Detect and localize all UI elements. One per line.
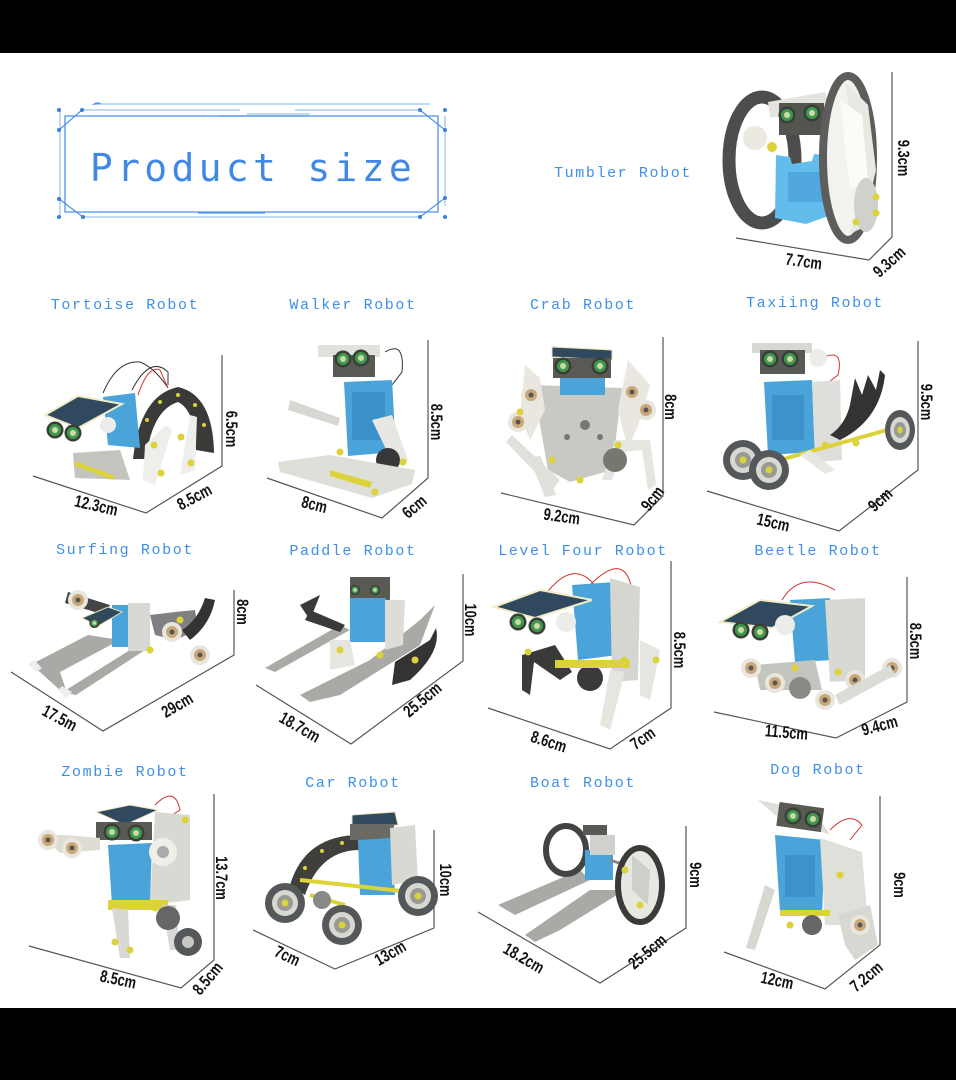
dimensions: Tortoise: 12.3cm [73,492,120,520]
dimensions: Dog: 7.2cm [847,958,887,996]
robot: Surfing [28,590,215,698]
label: Level Four Robot: Level Four Robot [498,543,668,560]
dimensions: Beetle: 8.5cm [905,623,925,659]
dimensions: Level Four: 8.6cm [528,727,569,757]
dimensions: Car [253,830,455,971]
title text: Product size [90,146,416,190]
dimensions: Surfing: 8cm [232,599,252,625]
dimensions: Walker: 8.5cm [426,404,446,440]
label: Crab Robot: Crab Robot [530,297,636,314]
dimensions: Car: 7cm [271,942,303,971]
dimensions: Tortoise: 6.5cm [221,411,241,447]
label: Tumbler Robot: Tumbler Robot [554,165,692,182]
robot: Crab [506,347,656,497]
dimensions: Surfing [11,590,252,736]
dimensions: Paddle: 18.7cm [276,708,323,747]
dimensions: Tumbler: 9.3cm [870,243,910,282]
label: Dog Robot: Dog Robot [770,762,866,779]
dimensions: Tumbler: 9.3cm [893,140,913,176]
dimensions: Dog: 9cm [889,872,909,898]
dimensions: Boat: 9cm [685,862,705,888]
label: Walker Robot: Walker Robot [289,297,417,314]
dimensions: Tortoise [33,355,241,520]
dimensions: Boat [478,826,705,983]
dimensions: Zombie: 8.5cm [98,967,138,993]
dimensions: Boat: 18.2cm [500,939,547,978]
title badge: Product size [57,102,447,219]
dimensions: Zombie: 13.7cm [211,856,231,900]
dimensions: Taxiing: 15cm [755,510,791,536]
dimensions: Surfing: 29cm [158,689,197,722]
dimensions: Crab: 8cm [660,394,680,420]
robot: Boat [498,825,662,942]
robot: Paddle [265,577,437,702]
robot: Car [265,812,438,945]
dimensions: Crab: 9cm [638,483,669,515]
dimensions: Paddle: 25.5cm [400,679,446,722]
robot: Tumbler [729,76,880,240]
label: Car Robot: Car Robot [305,775,401,792]
top black bar [0,0,956,53]
robot: Dog [746,800,878,960]
label: Boat Robot: Boat Robot [530,775,636,792]
dimensions: Paddle [256,574,480,747]
robot: Level Four [494,569,660,730]
dimensions: Dog [724,796,909,996]
label: Beetle Robot: Beetle Robot [754,543,882,560]
dimensions: Surfing: 17.5m [39,701,80,736]
dimensions: Level Four: 7cm [627,724,659,754]
robot: Tortoise [45,362,214,485]
dimensions: Crab: 9.2cm [542,505,581,529]
dimensions: Level Four: 8.5cm [669,632,689,668]
dimensions: Beetle: 11.5cm [764,722,809,744]
bottom black bar [0,1008,956,1080]
dimensions: Car: 13cm [371,937,410,970]
dimensions: Boat: 25.5cm [625,931,671,974]
dimensions: Taxiing [707,341,936,536]
label: Tortoise Robot: Tortoise Robot [51,297,199,314]
label: Taxiing Robot: Taxiing Robot [746,295,884,312]
dimensions: Beetle: 9.4cm [860,712,900,740]
dimensions: Zombie [29,794,231,999]
dimensions: Tortoise: 8.5cm [174,480,215,515]
dimensions: Crab [501,337,680,529]
robot: Walker [278,345,415,498]
robot: Beetle [720,582,902,710]
dimensions: Taxiing: 9.5cm [916,384,936,420]
label: Paddle Robot: Paddle Robot [289,543,417,560]
dimensions: Dog: 12cm [759,968,795,994]
dimensions: Beetle [714,577,925,744]
label: Surfing Robot: Surfing Robot [56,542,194,559]
dimensions: Level Four [488,561,689,757]
dimensions: Tumbler: 7.7cm [784,250,823,274]
dimensions: Zombie: 8.5cm [189,959,227,999]
label: Zombie Robot: Zombie Robot [61,764,189,781]
dimensions: Car: 10cm [435,863,455,897]
dimensions: Walker: 6cm [399,491,431,523]
dimensions: Taxiing: 9cm [865,484,897,516]
dimensions: Walker [267,340,446,523]
robot: Taxiing [723,343,915,490]
dimensions: Paddle: 10cm [460,603,480,637]
robot: Zombie [38,796,202,958]
dimensions: Walker: 8cm [299,493,329,517]
dimensions: Tumbler [736,72,913,282]
